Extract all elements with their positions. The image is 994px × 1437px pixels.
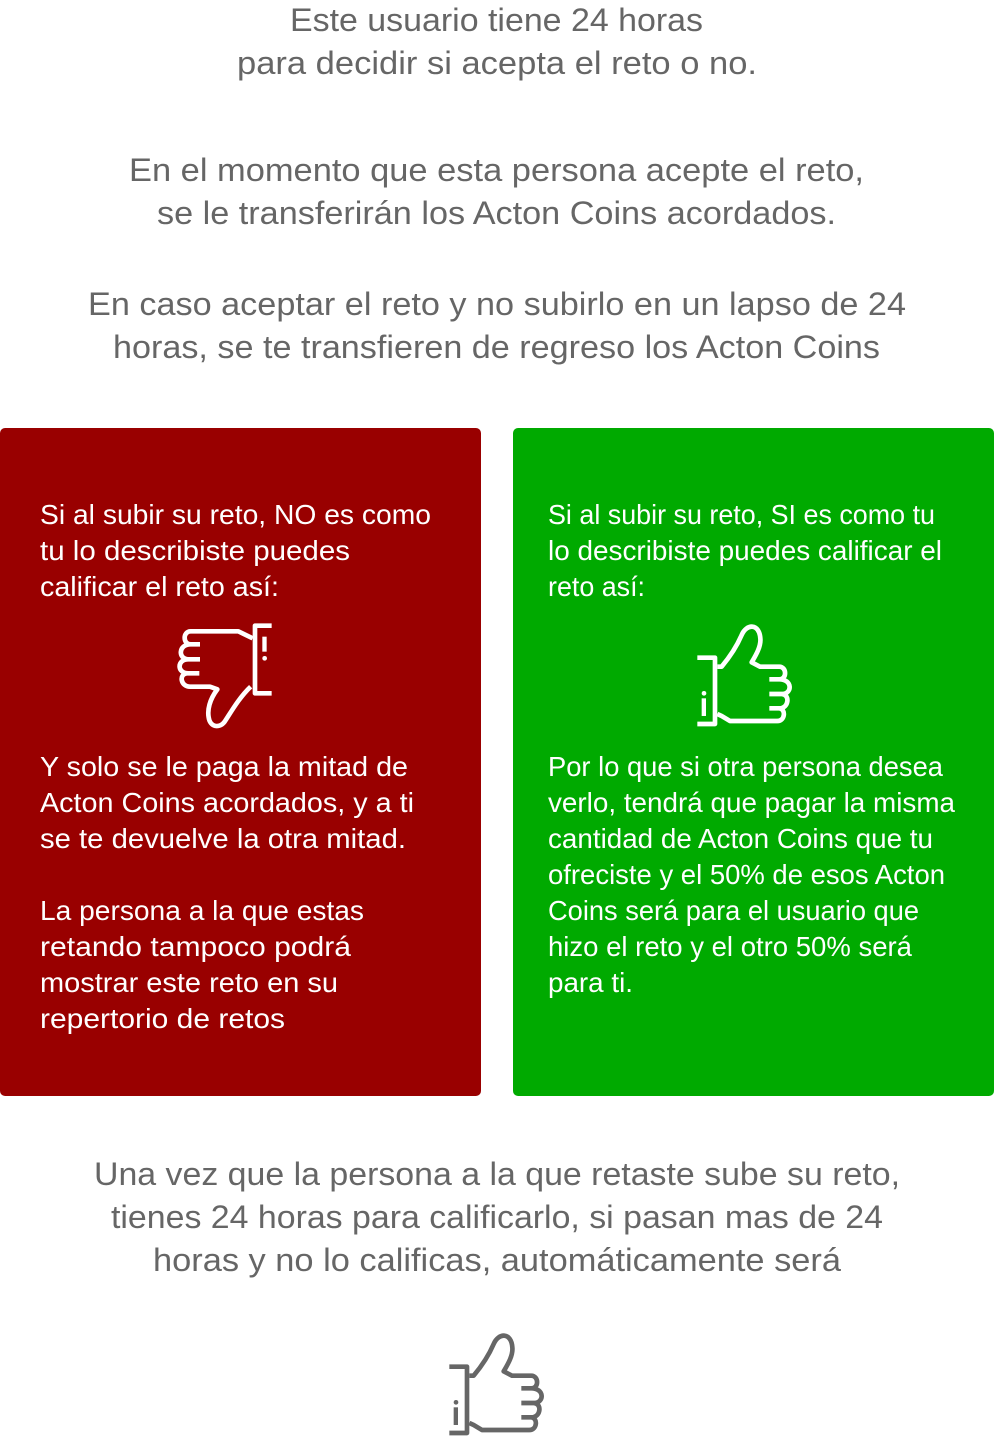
text block: green panel intro: Si al subir su reto, SI es como tu [548, 499, 935, 530]
text block: 24 hours to rate: Una vez que la persona a la que retaste sube su reto, [94, 1156, 900, 1192]
text block: revenue split: Coins será para el usuario que [548, 895, 919, 926]
text block: coins transferred on acceptance [129, 152, 864, 231]
text block: 24 hours to rate: horas y no lo calificas, automáticamente será [153, 1242, 842, 1278]
text block: red panel intro [40, 499, 431, 602]
panel: thumbs up (green) [513, 428, 994, 1096]
text block: challenge cannot be shown: repertorio de retos [40, 1003, 285, 1034]
text block: 24 hours to decide: Este usuario tiene 24 horas [290, 2, 703, 38]
text block: coins transferred on acceptance: En el momento que esta persona acepte el reto, [129, 152, 864, 188]
text block: half payment: Y solo se le paga la mitad de [40, 751, 408, 782]
icon: thumbs down [180, 626, 272, 726]
text block: 24 hours to rate: tienes 24 horas para calificarlo, si pasan mas de 24 [111, 1199, 883, 1235]
text block: revenue split: ofreciste y el 50% de esos Acton [548, 859, 945, 890]
text block: red panel intro: calificar el reto así: [40, 571, 279, 602]
text block: red panel intro: tu lo describiste puedes [40, 535, 350, 566]
text block: half payment: se te devuelve la otra mitad. [40, 823, 406, 854]
text block: coins returned if not uploaded [88, 286, 906, 365]
text block: half payment: Acton Coins acordados, y a ti [40, 787, 414, 818]
text block: revenue split: verlo, tendrá que pagar la misma [548, 787, 956, 818]
panel: thumbs down (red) [0, 428, 481, 1096]
text block: green panel intro: reto así: [548, 571, 645, 602]
icon: thumbs up (grey) [449, 1336, 542, 1433]
text block: challenge cannot be shown: La persona a la que estas [40, 895, 364, 926]
icon: thumbs up [697, 627, 790, 724]
text block: green panel intro: lo describiste puedes calificar el [548, 535, 942, 566]
text block: 24 hours to decide: para decidir si acepta el reto o no. [237, 45, 757, 81]
text block: coins transferred on acceptance: se le transferirán los Acton Coins acordados. [157, 195, 836, 231]
text block: revenue split: hizo el reto y el otro 50% será [548, 931, 913, 962]
text block: coins returned if not uploaded: horas, se te transfieren de regreso los Acton Coins [113, 329, 880, 365]
text block: revenue split [548, 751, 956, 998]
text block: 24 hours to rate [94, 1156, 900, 1278]
text block: coins returned if not uploaded: En caso aceptar el reto y no subirlo en un lapso de 24 [88, 286, 906, 322]
text block: green panel intro [548, 499, 942, 602]
text block: half payment [40, 751, 414, 854]
text block: 24 hours to decide [237, 2, 757, 81]
text block: red panel intro: Si al subir su reto, NO es como [40, 499, 431, 530]
text block: revenue split: cantidad de Acton Coins que tu [548, 823, 933, 854]
text block: challenge cannot be shown: retando tampoco podrá [40, 931, 352, 962]
text block: revenue split: para ti. [548, 967, 633, 998]
text block: revenue split: Por lo que si otra persona desea [548, 751, 944, 782]
text block: challenge cannot be shown [40, 895, 364, 1034]
text block: challenge cannot be shown: mostrar este reto en su [40, 967, 338, 998]
